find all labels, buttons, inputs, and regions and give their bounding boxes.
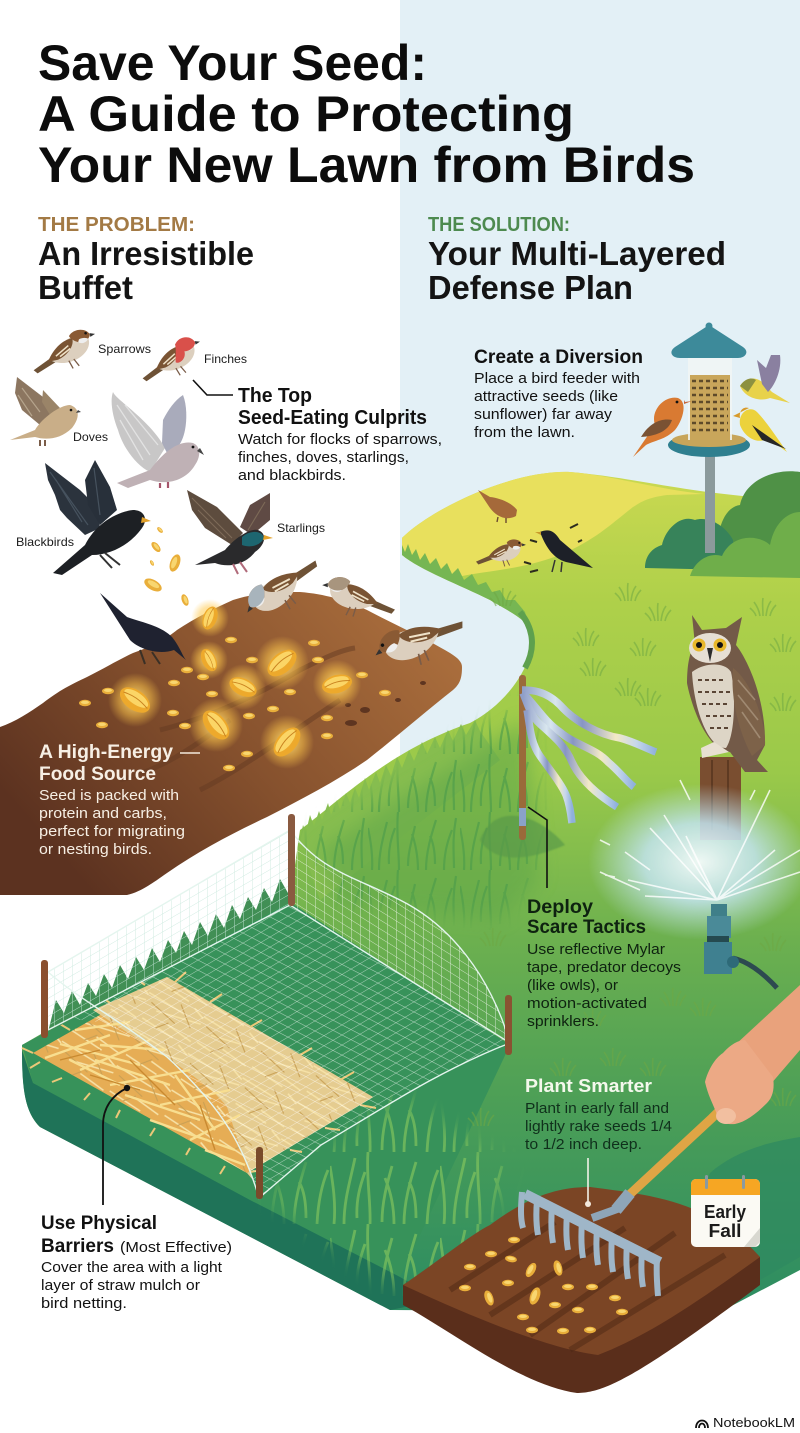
- logo: NotebookLM: NotebookLM: [713, 1415, 795, 1430]
- icon: flying brown bird: [10, 377, 81, 446]
- arrow: scare tactics callout line: [528, 807, 547, 888]
- bird name labels: [16, 342, 325, 549]
- text block: use physical barriers: Use Physical: [41, 1213, 157, 1234]
- bird name labels: Finches: [204, 352, 247, 366]
- icon: sparrow perched: [27, 327, 101, 377]
- text block: top culprits: Seed-Eating Culprits: [238, 407, 427, 429]
- text block: plant smarter: Plant Smarter: [525, 1076, 652, 1096]
- icon: falling seeds: [142, 526, 190, 607]
- text block: high-energy food source: Seed is packed with: [39, 787, 179, 804]
- icon: bird netting with stakes: [41, 814, 512, 1199]
- text block: create a diversion: [474, 347, 643, 441]
- icon: scattered grass tufts: [468, 583, 796, 1126]
- icon: finch perched: [135, 334, 207, 384]
- text block: top culprits: and blackbirds.: [238, 467, 346, 484]
- text block: top culprits: Watch for flocks of sparrows,: [238, 431, 442, 448]
- lawn: sloping green ground: [22, 472, 800, 1312]
- heading: the problem: [38, 214, 254, 306]
- icon: flying blackbird: [45, 460, 151, 575]
- text block: use physical barriers: Barriers: [41, 1236, 114, 1257]
- icon: flying starling: [187, 490, 273, 574]
- text block: deploy scare tactics: Scare Tactics: [527, 917, 646, 938]
- text block: plant smarter: Plant in early fall and: [525, 1100, 669, 1117]
- heading: the problem: An Irresistible: [38, 235, 254, 272]
- text block: plant smarter: lightly rake seeds 1/4: [525, 1118, 672, 1135]
- text block: create a diversion: Place a bird feeder with: [474, 370, 640, 387]
- text block: deploy scare tactics: Use reflective Mylar: [527, 941, 665, 958]
- icon: rake and hand: [521, 985, 800, 1296]
- text block: high-energy food source: A High-Energy: [39, 742, 173, 763]
- text block: use physical barriers: (Most Effective): [120, 1239, 232, 1256]
- text block: deploy scare tactics: (like owls), or: [527, 977, 618, 994]
- panel: brown soil with seeds: [0, 592, 462, 895]
- icon: calendar Early Fall: Early: [704, 1202, 746, 1222]
- text block: high-energy food source: [39, 742, 185, 858]
- title: Save Your Seed:: [38, 35, 427, 91]
- text block: use physical barriers: layer of straw mulch or: [41, 1277, 200, 1294]
- text block: high-energy food source: Food Source: [39, 764, 156, 785]
- text block: plant smarter: to 1/2 inch deep.: [525, 1136, 642, 1153]
- heading: the solution: Your Multi-Layered: [428, 235, 726, 272]
- text block: plant smarter: [525, 1076, 672, 1153]
- icon: grass along back edge of netted area: [48, 879, 290, 1032]
- text block: deploy scare tactics: [527, 897, 681, 1030]
- text block: high-energy food source: or nesting birds.: [39, 841, 152, 858]
- text block: top culprits: [238, 385, 442, 484]
- bird name labels: Doves: [73, 430, 108, 444]
- arrow: finches callout line: [193, 380, 233, 395]
- bird name labels: Blackbirds: [16, 535, 74, 549]
- icon: sparrows pecking soil: [240, 540, 468, 685]
- icon: straw mulch: [22, 972, 376, 1180]
- text block: create a diversion: from the lawn.: [474, 424, 575, 441]
- icon: blackbird pecking soil: [100, 593, 186, 664]
- text block: deploy scare tactics: sprinklers.: [527, 1013, 599, 1030]
- title: Your New Lawn from Birds: [38, 137, 695, 193]
- text block: create a diversion: sunflower) far away: [474, 406, 613, 423]
- icon: owl on post: [687, 615, 768, 840]
- text block: top culprits: The Top: [238, 385, 312, 407]
- heading: the solution: [428, 214, 726, 306]
- icon: flying dove: [112, 392, 204, 488]
- icon: water sprinkler with spray: [588, 780, 800, 988]
- title: A Guide to Protecting: [38, 86, 574, 142]
- panel: bushes behind feeder: [645, 471, 800, 578]
- heading: the problem: THE PROBLEM:: [38, 214, 195, 236]
- text block: create a diversion: Create a Diversion: [474, 347, 643, 368]
- icon: birds at feeder: [633, 355, 790, 457]
- text block: high-energy food source: protein and carbs,: [39, 805, 167, 822]
- bird name labels: Sparrows: [98, 342, 151, 356]
- icon: bird feeder: [668, 322, 750, 553]
- text block: create a diversion: attractive seeds (like: [474, 388, 618, 405]
- icon: ground birds on lawn: [476, 490, 593, 572]
- text block: deploy scare tactics: tape, predator decoys: [527, 959, 681, 976]
- heading: the solution: Defense Plan: [428, 269, 633, 306]
- text block: use physical barriers: bird netting.: [41, 1295, 127, 1312]
- arrow: plant smarter callout line: [585, 1158, 591, 1207]
- text block: high-energy food source: perfect for migrating: [39, 823, 185, 840]
- text block: deploy scare tactics: Deploy: [527, 897, 593, 918]
- icon: calendar Early Fall: [691, 1175, 760, 1247]
- arrow: high-energy callout line: [180, 752, 200, 754]
- text block: deploy scare tactics: motion-activated: [527, 995, 647, 1012]
- heading: the problem: Buffet: [38, 269, 133, 306]
- text block: use physical barriers: [41, 1213, 232, 1312]
- bird name labels: Starlings: [277, 521, 325, 535]
- heading: the solution: THE SOLUTION:: [428, 214, 570, 236]
- text block: use physical barriers: Cover the area with a light: [41, 1259, 223, 1276]
- text block: top culprits: finches, doves, starlings,: [238, 449, 409, 466]
- icon: calendar Early Fall: Fall: [708, 1221, 742, 1241]
- title: [38, 35, 695, 193]
- panel: planting soil plot: [403, 1187, 760, 1393]
- icon: Mylar tape on pole: [480, 675, 656, 858]
- arrow: physical barriers callout line: [103, 1085, 130, 1205]
